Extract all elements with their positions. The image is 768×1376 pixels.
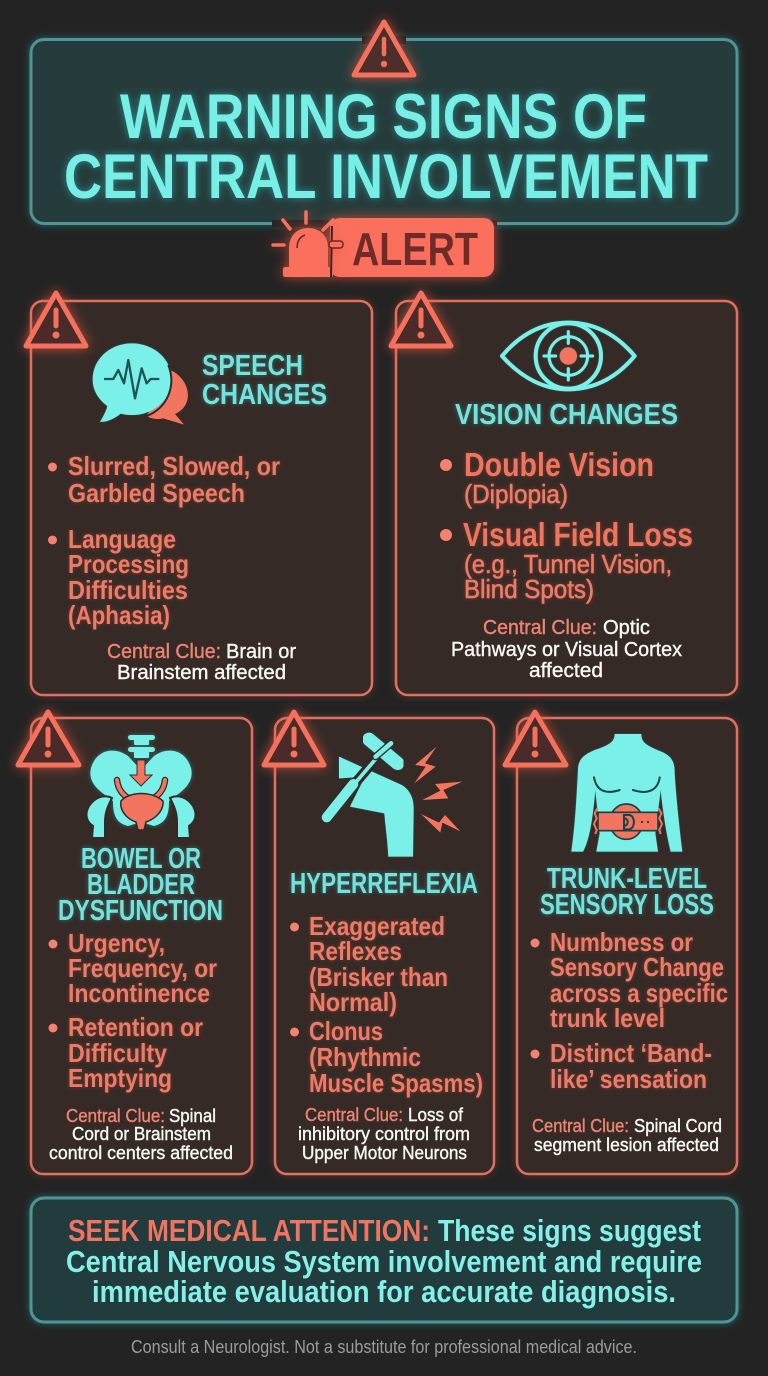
central clue: Central Clue: (483, 617, 597, 639)
central clue: Brainstem affected (117, 662, 286, 684)
callout: seek medical attention (31, 1198, 737, 1322)
central clue: Central Clue: (66, 1106, 165, 1126)
central clue (298, 1105, 470, 1163)
symptom list: (Diplopia) (464, 479, 568, 509)
icon: header warning triangle (354, 22, 414, 75)
icon: warning triangle (264, 712, 324, 765)
central clue (107, 641, 296, 684)
symptom list: (Brisker than (309, 962, 448, 992)
central clue (451, 617, 682, 682)
heading: BLADDER (87, 869, 195, 901)
central clue: Upper Motor Neurons (302, 1143, 467, 1163)
symptom list (48, 928, 217, 1093)
symptom list: Incontinence (68, 978, 210, 1008)
alert label: ALERT (352, 223, 478, 275)
heading: CHANGES (202, 379, 327, 411)
central clue: Loss of (408, 1105, 464, 1125)
panel: speech changes (26, 293, 372, 695)
symptom list: (Rhythmic (309, 1042, 421, 1072)
callout: seek medical attention: immediate evaluation for accurate diagnosis. (92, 1274, 676, 1309)
central clue: inhibitory control from (298, 1124, 470, 1144)
symptom list: like’ sensation (550, 1064, 707, 1094)
symptom list: Frequency, or (68, 953, 217, 983)
central clue (532, 1116, 722, 1155)
symptom list: Slurred, Slowed, or (68, 451, 280, 481)
symptom list: Difficulty (68, 1038, 167, 1068)
central clue (49, 1106, 233, 1163)
symptom list (440, 446, 693, 604)
symptom list (48, 451, 280, 630)
heading (58, 843, 223, 927)
icon: eye with target (502, 323, 635, 389)
symptom list: Muscle Spasms) (309, 1068, 483, 1098)
symptom list: Clonus (309, 1016, 383, 1046)
central clue: control centers affected (49, 1143, 233, 1163)
symptom list: across a specific (550, 978, 728, 1008)
symptom list: Numbness or (550, 927, 693, 957)
symptom list: trunk level (550, 1003, 665, 1033)
central clue: Optic (603, 617, 650, 639)
symptom list: Visual Field Loss (463, 516, 693, 553)
heading: VISION CHANGES (455, 399, 678, 431)
heading: SPEECH (202, 350, 303, 382)
central clue: segment lesion affected (534, 1135, 719, 1155)
central clue: Central Clue: (532, 1116, 629, 1136)
symptom list: Reflexes (309, 936, 402, 966)
pill (330, 218, 494, 277)
header panel (31, 36, 737, 224)
symptom list: Retention or (68, 1012, 203, 1042)
symptom list: Processing (68, 549, 189, 579)
central clue: Brain or (226, 641, 296, 663)
icon: reflex hammer and knee (327, 739, 462, 857)
icon: torso with belt (571, 734, 682, 852)
symptom list (530, 927, 728, 1094)
symptom list: Garbled Speech (68, 478, 245, 508)
symptom list: Double Vision (464, 446, 654, 483)
title (64, 82, 708, 212)
heading (540, 863, 714, 921)
callout: seek medical attention: SEEK MEDICAL ATTENTION: (68, 1213, 430, 1248)
central clue: Spinal (169, 1106, 216, 1126)
symptom list: Normal) (309, 987, 397, 1017)
icon: pelvis and bladder (86, 735, 196, 838)
icon: speech bubbles (93, 343, 188, 425)
central clue: Pathways or Visual Cortex (451, 639, 682, 661)
central clue: Central Clue: (305, 1105, 403, 1125)
panel: vision changes (391, 293, 737, 695)
symptom list (290, 911, 483, 1098)
icon: warning triangle (18, 712, 79, 765)
heading (202, 350, 327, 411)
symptom list: (e.g., Tunnel Vision, (464, 549, 672, 579)
heading: BOWEL OR (81, 843, 201, 875)
central clue: Spinal Cord (634, 1116, 722, 1136)
symptom list: Distinct ‘Band- (550, 1038, 712, 1068)
panel: bowel or bladder dysfunction (18, 712, 252, 1174)
footer disclaimer: Consult a Neurologist. Not a substitute for professional medical advice. (131, 1337, 637, 1357)
title: WARNING SIGNS OF (120, 82, 647, 152)
panel: trunk-level sensory loss (505, 712, 737, 1174)
heading: DYSFUNCTION (58, 895, 223, 927)
icon: warning triangle (391, 293, 451, 346)
central clue: Central Clue: (107, 641, 221, 663)
symptom list: (Aphasia) (68, 600, 170, 630)
icon: siren (273, 212, 343, 277)
icon: femurs (86, 796, 196, 838)
symptom list: Exaggerated (309, 911, 445, 941)
central clue: Cord or Brainstem (72, 1124, 211, 1144)
callout: seek medical attention: These signs suggest (438, 1213, 701, 1248)
icon: warning triangle (505, 712, 566, 765)
icon: warning triangle (26, 293, 86, 346)
symptom list: Language (68, 524, 176, 554)
heading: HYPERREFLEXIA (290, 868, 478, 900)
symptom list: Blind Spots) (464, 574, 594, 604)
symptom list: Emptying (68, 1063, 172, 1093)
symptom list: Difficulties (68, 575, 188, 605)
panel: hyperreflexia (264, 712, 494, 1174)
alert badge (272, 212, 497, 277)
central clue: affected (529, 660, 603, 682)
heading: TRUNK-LEVEL (547, 863, 707, 895)
heading: SENSORY LOSS (540, 889, 714, 921)
symptom list: Urgency, (68, 928, 165, 958)
symptom list: Sensory Change (550, 952, 724, 982)
